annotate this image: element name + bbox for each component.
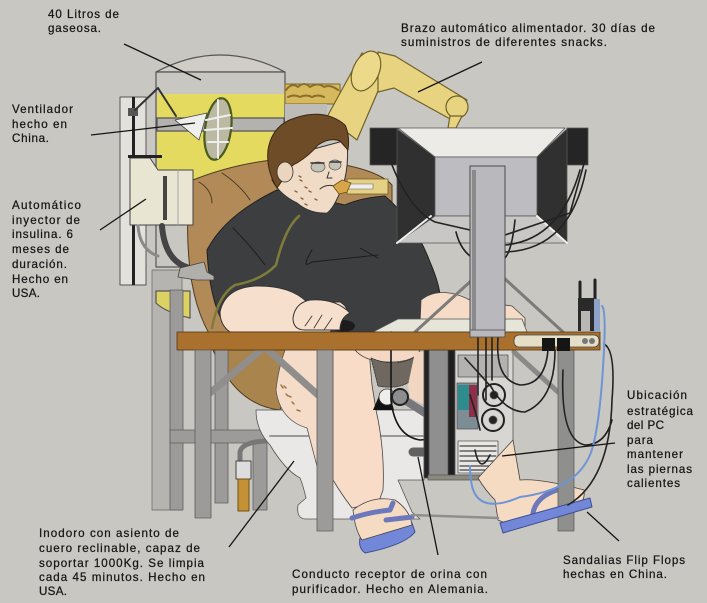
toilet xyxy=(256,410,424,519)
monitor stand column xyxy=(470,166,505,337)
scissor brace xyxy=(204,350,318,398)
label: insulin injector: meses de xyxy=(12,243,69,256)
hand on mouse xyxy=(293,300,350,330)
right hand behind stand xyxy=(420,292,525,328)
label: sandals: Sandalias Flip Flops xyxy=(563,554,685,567)
blue cable xyxy=(470,306,605,504)
mouse cable xyxy=(391,332,495,440)
label: PC location: mantener xyxy=(627,448,683,461)
head xyxy=(268,114,349,213)
label: insulin injector: USA. xyxy=(12,287,40,300)
front desk legs xyxy=(195,350,333,531)
label: PC location: las piernas xyxy=(627,463,692,476)
label: sandals: hechas en China. xyxy=(563,568,667,581)
snack feeder at mouth xyxy=(333,179,388,194)
label: feeding arm: suministros de diferentes snacks. xyxy=(401,36,607,49)
label: urine conduit: Conducto receptor de orina con xyxy=(292,568,487,581)
label: insulin injector: inyector de xyxy=(12,214,80,227)
label: fan: Ventilador xyxy=(12,103,73,116)
label: toilet xyxy=(39,527,205,598)
crotch hair xyxy=(371,357,415,387)
skin right of crotch xyxy=(408,352,425,405)
desk leg right xyxy=(558,350,574,531)
PC tower xyxy=(424,350,517,480)
illustration: man at automated computer station xyxy=(120,46,613,553)
label: fan: China. xyxy=(12,132,49,145)
label: insulin injector: Hecho en xyxy=(12,273,68,286)
label: toilet: USA. xyxy=(39,585,67,598)
label: sandals xyxy=(563,554,685,581)
label: feeding arm: Brazo automático alimentador. 30 días de xyxy=(401,22,655,35)
freckled thigh xyxy=(276,350,333,480)
label: fan: hecho en xyxy=(12,118,67,131)
belly under table xyxy=(355,350,420,362)
water filter pipe xyxy=(236,441,266,511)
floor pipe xyxy=(412,515,498,518)
panel: back frame rail xyxy=(120,97,182,510)
fan xyxy=(135,88,235,162)
leader line: sandals xyxy=(587,512,619,541)
leader line: injector xyxy=(100,199,146,230)
label: urine conduit xyxy=(292,568,488,596)
leader line: conduit xyxy=(418,457,438,555)
monitor xyxy=(370,128,588,243)
urine conduit xyxy=(373,389,425,452)
chair back xyxy=(188,160,392,350)
label: insulin injector xyxy=(12,199,81,300)
label: fan xyxy=(12,103,73,145)
flip flop left foot xyxy=(352,499,415,553)
leader line: soda xyxy=(124,44,201,80)
label: PC location: para xyxy=(627,434,654,447)
leader line: feeding arm xyxy=(418,62,482,92)
label: toilet: Inodoro con asiento de xyxy=(39,527,179,540)
label: toilet: cuero reclinable, capaz de xyxy=(39,542,200,555)
label: feeding arm xyxy=(401,22,655,49)
flip flop right foot xyxy=(500,498,592,533)
desk legs back xyxy=(170,290,267,510)
shirt and torso xyxy=(207,190,440,332)
power strip xyxy=(514,335,599,351)
left leg xyxy=(333,350,383,508)
robotic feeding arm xyxy=(327,46,468,140)
leader line: fan xyxy=(91,123,195,135)
insulin tube xyxy=(212,216,299,328)
router xyxy=(578,280,600,332)
PC cables xyxy=(465,338,613,505)
label: insulin injector: insulina. 6 xyxy=(12,228,73,241)
label: soda xyxy=(48,8,119,35)
soda tank xyxy=(156,55,285,318)
insulin injector hose xyxy=(138,226,214,280)
label: toilet: soportar 1000Kg. Se limpia xyxy=(39,557,205,570)
label: soda: gaseosa. xyxy=(48,22,101,35)
label: PC location: del PC xyxy=(627,419,664,432)
seat lower xyxy=(213,350,300,410)
right foot and calf xyxy=(478,440,584,525)
label: PC location: estratégica xyxy=(627,405,694,418)
monitor stand arms xyxy=(415,278,563,332)
desk diagonal xyxy=(514,352,558,392)
label: soda: 40 Litros de xyxy=(48,8,119,21)
monitor cables xyxy=(392,160,586,258)
leader line: toilet xyxy=(229,461,294,547)
label: insulin injector: duración. xyxy=(12,258,67,271)
desk top xyxy=(177,332,600,350)
insulin injector box xyxy=(128,155,193,225)
snacks tray xyxy=(285,84,340,126)
mouse xyxy=(331,320,355,332)
leader line: PC xyxy=(502,443,615,456)
label: urine conduit: purificador. Hecho en Alemania. xyxy=(292,583,488,596)
label: toilet: cada 45 minutos. Hecho en xyxy=(39,571,205,584)
label: PC location: calientes xyxy=(627,477,680,490)
his right forearm xyxy=(220,286,347,332)
label: PC location xyxy=(627,389,694,490)
stand base front of desk xyxy=(470,330,505,337)
keyboard xyxy=(373,319,527,332)
label: insulin injector: Automático xyxy=(12,199,81,212)
label: PC location: Ubicación xyxy=(627,389,687,402)
